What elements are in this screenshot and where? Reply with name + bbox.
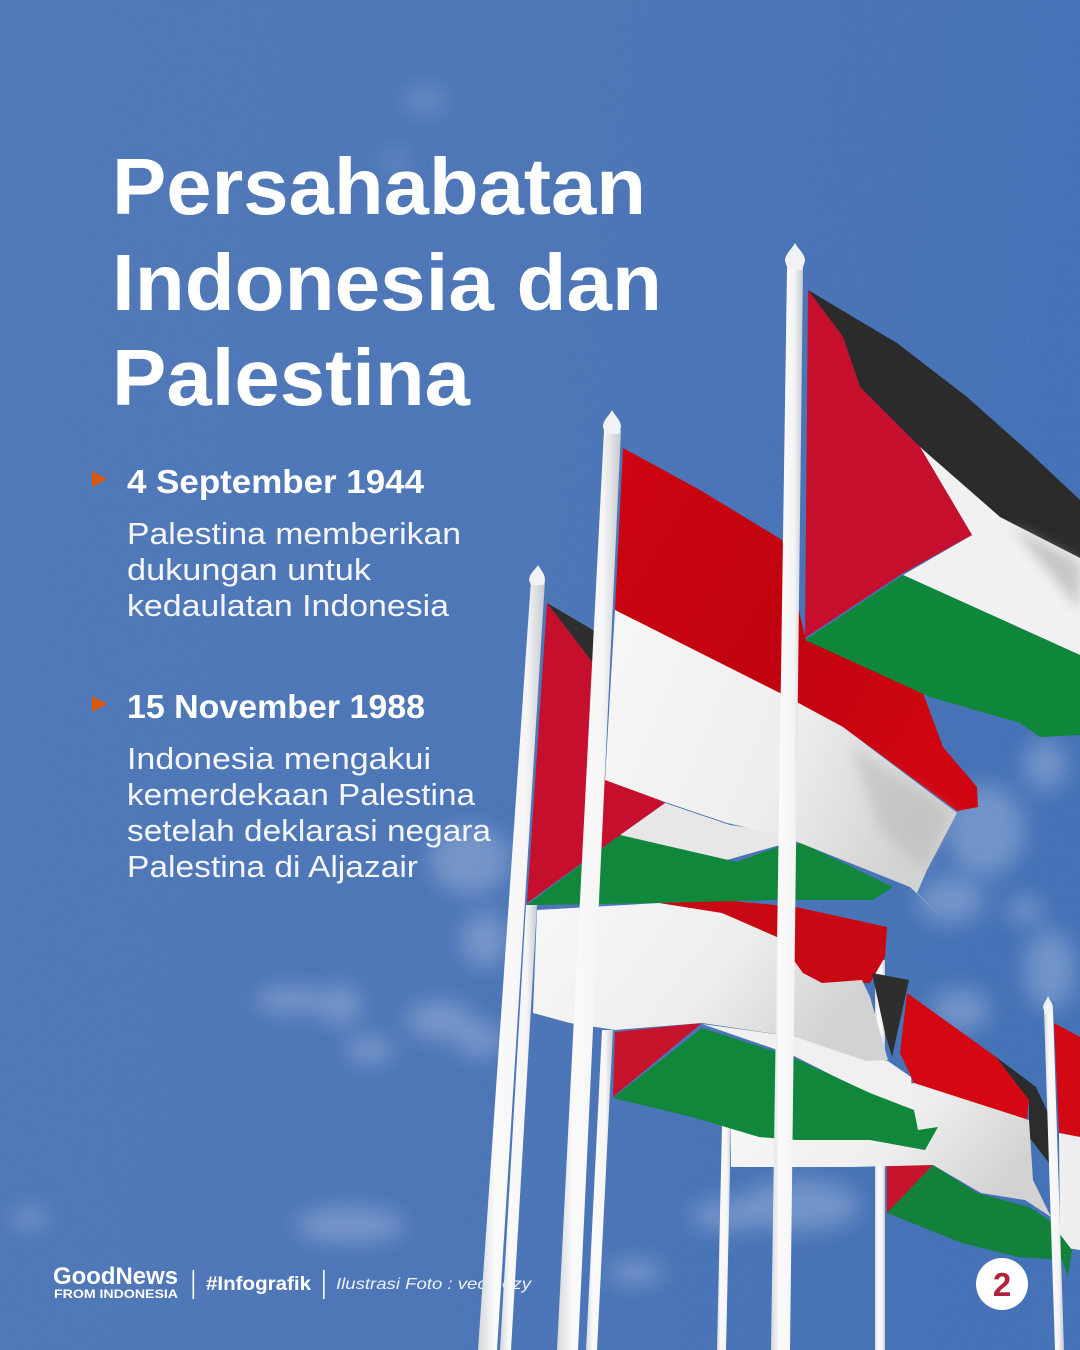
far right pole	[1044, 1010, 1064, 1350]
finial front	[785, 243, 805, 270]
left pole	[478, 580, 545, 1350]
photo credit: Ilustrasi Foto : vecteezy	[336, 1276, 532, 1293]
title: Persahabatan	[112, 142, 646, 231]
center pole	[557, 430, 621, 1350]
Palestine flag, large	[805, 290, 1080, 737]
description 1988: Palestina di Aljazair	[127, 849, 418, 884]
page number badge: 2	[993, 1266, 1011, 1303]
logo: GoodNews: GoodNews	[53, 1263, 178, 1290]
description 1944	[127, 516, 461, 623]
description 1944: Palestina memberikan	[127, 516, 461, 551]
description 1988: kemerdekaan Palestina	[127, 777, 476, 812]
black fold	[872, 973, 909, 1057]
Palestine flag, back right	[887, 1162, 1072, 1277]
date 1944: 4 September 1944	[127, 463, 425, 500]
logo: GoodNews: FROM INDONESIA	[54, 1287, 178, 1301]
Palestine flag, third row	[613, 1023, 938, 1150]
arrow bullet 1988	[92, 696, 107, 712]
shaded folds	[850, 745, 950, 870]
description 1988	[127, 741, 492, 884]
far right flag	[1054, 1023, 1080, 1250]
Indonesia flag, large	[605, 448, 978, 917]
second row pole	[500, 905, 537, 1350]
front pole	[771, 268, 803, 1350]
description 1988: setelah deklarasi negara	[127, 813, 492, 848]
Palestine flag, left	[527, 603, 893, 905]
description 1944: dukungan untuk	[127, 552, 372, 587]
Indonesia flag, back	[731, 993, 1051, 1217]
back pole	[875, 960, 885, 1350]
back pole 2	[717, 1125, 731, 1350]
third row pole	[586, 1030, 613, 1350]
back flag group	[717, 960, 1072, 1350]
footer credits	[53, 1263, 532, 1301]
title: Palestina	[112, 333, 471, 422]
hashtag: #Infografik	[206, 1274, 311, 1295]
finial far right	[1043, 996, 1053, 1013]
page number badge	[976, 1258, 1028, 1310]
arrow bullet 1944	[92, 471, 107, 487]
finial center	[603, 410, 621, 434]
title: Indonesia dan	[112, 238, 662, 327]
timeline entry: 1988	[92, 688, 492, 884]
Indonesia flag, second row	[533, 900, 909, 1061]
description 1988: Indonesia mengakui	[127, 741, 431, 776]
date 1988: 15 November 1988	[127, 688, 425, 725]
finial left	[529, 565, 545, 585]
description 1944: kedaulatan Indonesia	[127, 588, 450, 623]
timeline entry: 1944	[92, 463, 461, 623]
title	[112, 142, 662, 422]
